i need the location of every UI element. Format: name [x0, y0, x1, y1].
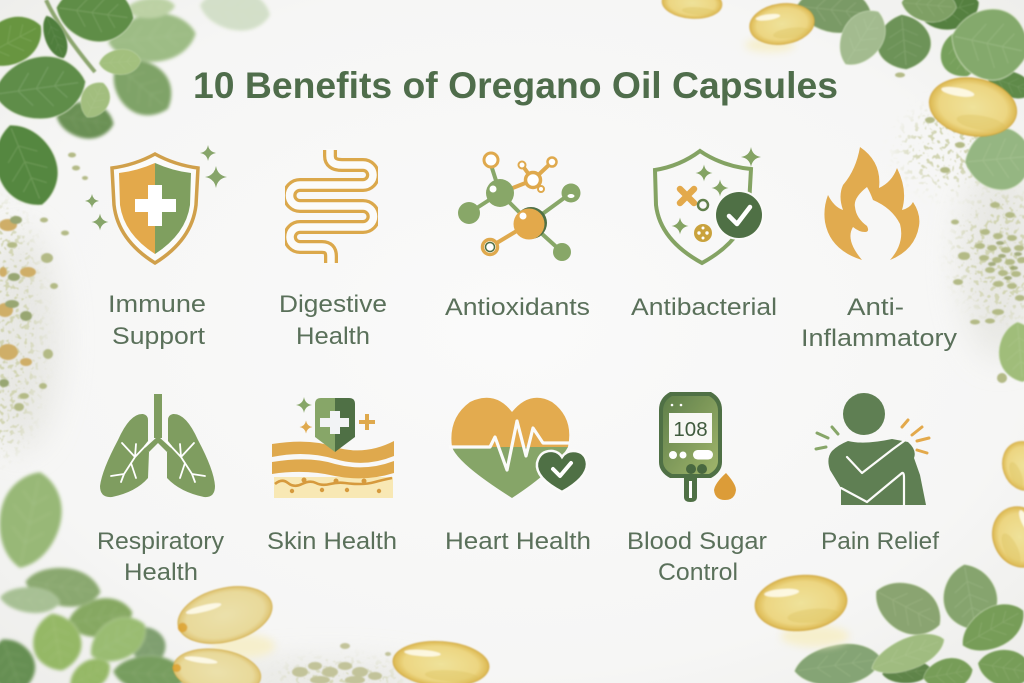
- icon: anti-inflammatory flame: [824, 147, 919, 260]
- label: immune support: Support: [112, 323, 205, 350]
- icon: digestive intestine: [290, 149, 374, 264]
- label: pain relief: Pain Relief: [821, 528, 939, 555]
- label: skin health: Skin Health: [267, 528, 397, 555]
- label: digestive health: Digestive: [279, 291, 387, 318]
- icon: skin health layers: [272, 397, 394, 498]
- icon: immune support shield: [85, 145, 227, 263]
- icon: respiratory lungs: [100, 394, 215, 497]
- icon: pain relief figure: [816, 393, 929, 505]
- leaves: top-right: [794, 0, 1024, 384]
- icon: antioxidants molecule: [458, 153, 580, 261]
- leaves: top-left: [54, 0, 272, 142]
- label: immune support: Immune: [108, 291, 206, 318]
- label: respiratory health: [97, 528, 225, 586]
- title: 10 Benefits of Oregano Oil Capsules: [193, 64, 838, 106]
- label: respiratory health: Respiratory: [97, 528, 225, 555]
- label: respiratory health: Health: [124, 559, 198, 586]
- label: digestive health: [279, 291, 387, 350]
- label: anti-inflammatory: Anti-: [847, 294, 904, 321]
- stem: top-left sprig: [46, 0, 95, 72]
- label: anti-inflammatory: Inflammatory: [801, 325, 958, 352]
- leaves: bottom-right: [792, 560, 1024, 683]
- icon: blood sugar meter: [659, 392, 736, 502]
- label: blood sugar control: Control: [658, 559, 738, 586]
- icon: antibacterial shield: [655, 147, 764, 263]
- icon: heart health: [449, 398, 587, 498]
- label: blood sugar control: Blood Sugar: [627, 528, 767, 555]
- label: digestive health: Health: [296, 323, 370, 350]
- label: blood sugar control: [627, 528, 767, 586]
- leaves: bottom-left: [0, 466, 188, 683]
- label: immune support: [108, 291, 206, 350]
- icon: blood sugar meter: 108: [673, 418, 708, 441]
- label: heart health: Heart Health: [445, 528, 591, 555]
- leaves: top-left front: [0, 0, 142, 216]
- label: antioxidants: Antioxidants: [445, 294, 590, 321]
- capsule reflections: [211, 38, 849, 658]
- label: anti-inflammatory: [801, 294, 958, 352]
- label: antibacterial: Antibacterial: [631, 294, 777, 321]
